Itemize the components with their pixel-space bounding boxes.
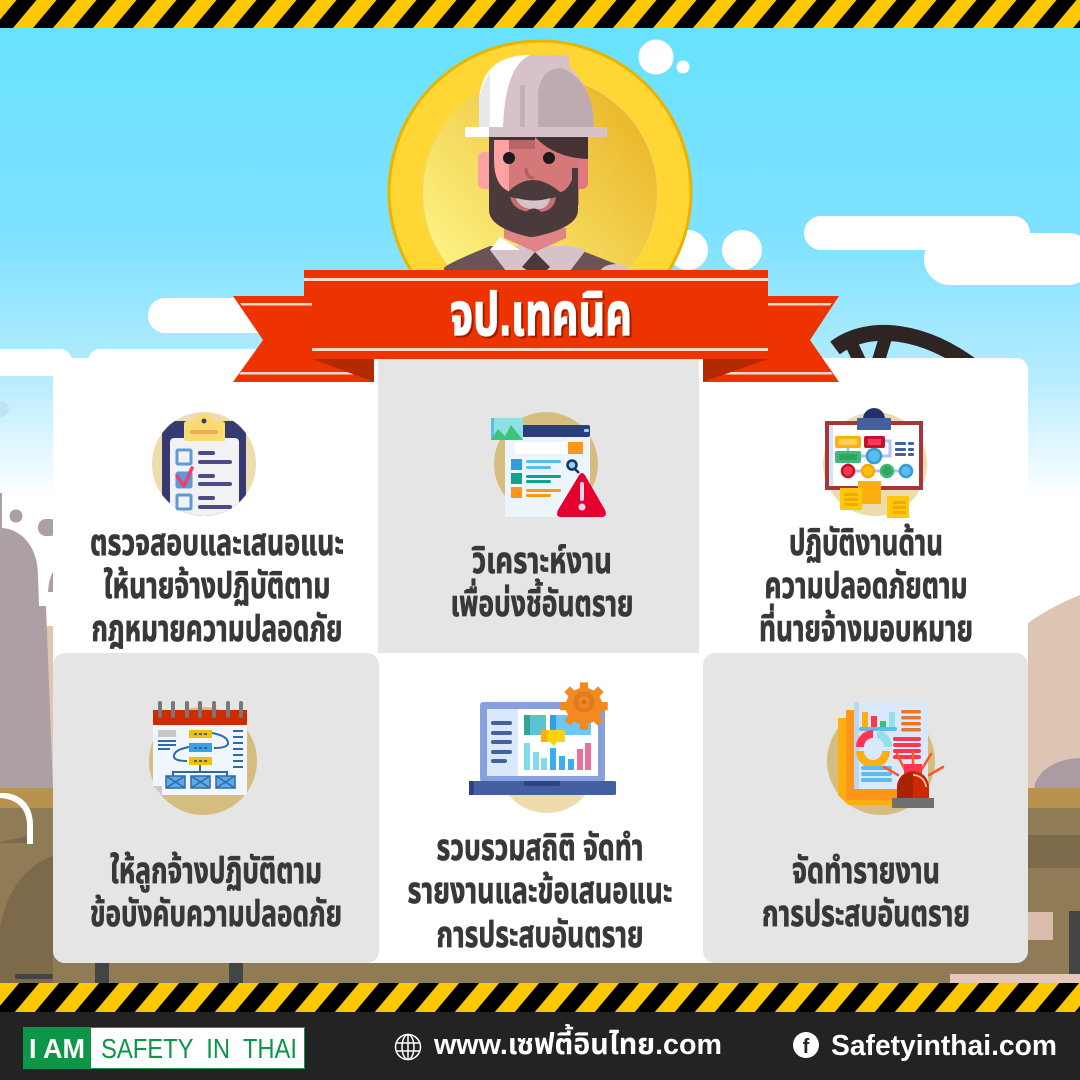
right tail xyxy=(703,296,839,382)
nose xyxy=(526,168,534,178)
text: collect statistics: การประสบอันตราย xyxy=(436,914,644,955)
title ribbon xyxy=(233,270,839,382)
icon: laptop statistics xyxy=(469,682,616,813)
logo: I AM xyxy=(29,1033,85,1064)
right hill silhouette xyxy=(1028,595,1080,790)
eyes xyxy=(503,152,515,164)
logo xyxy=(23,1027,304,1069)
left factory silhouette xyxy=(0,493,58,790)
text: accident report: จัดทำรายงาน xyxy=(792,850,940,891)
left tail xyxy=(233,296,374,382)
hazard stripe: bottom xyxy=(0,983,1080,1012)
text: inspect and advise: กฎหมายความปลอดภัย xyxy=(92,608,342,649)
character: engineer xyxy=(444,55,632,271)
facebook page text: Safetyinthai.com xyxy=(831,1030,1057,1062)
title xyxy=(450,281,634,350)
suit xyxy=(444,246,632,271)
card background: bottom right xyxy=(703,653,1028,963)
clouds xyxy=(0,40,1080,417)
icon: calendar flowchart xyxy=(149,703,257,815)
icon: globe xyxy=(396,1034,420,1060)
text: analyse work: เพื่อบ่งชี้อันตราย xyxy=(450,578,634,624)
footer bar xyxy=(0,1012,1080,1080)
text: employees comply: ข้อบังคับความปลอดภัย xyxy=(90,893,342,934)
text: safety duties: ปฏิบัติงานด้าน xyxy=(789,522,943,563)
text: safety duties: ที่นายจ้างมอบหมาย xyxy=(759,603,973,649)
text: employees comply: ให้ลูกจ้างปฏิบัติตาม xyxy=(110,850,322,892)
ears xyxy=(478,152,498,189)
text: collect statistics: รวบรวมสถิติ จัดทำ xyxy=(436,827,644,868)
ribbon main xyxy=(304,270,768,359)
card background: top middle xyxy=(378,359,699,653)
hazard stripe: top xyxy=(0,0,1080,28)
text: inspect and advise: ตรวจสอบและเสนอแนะ xyxy=(90,522,344,563)
text: safety duties xyxy=(759,522,973,649)
gear xyxy=(560,682,608,730)
hair xyxy=(535,137,588,159)
card background: bottom left xyxy=(53,653,379,963)
text: inspect and advise xyxy=(90,522,344,649)
logo: SAFETY IN THAI xyxy=(101,1033,297,1064)
wheel silhouette xyxy=(835,333,975,368)
icon: clipboard checklist xyxy=(152,412,256,516)
mouth xyxy=(510,197,556,212)
text: collect statistics: รายงานและข้อเสนอแนะ xyxy=(408,870,672,911)
beard xyxy=(489,137,578,237)
text: safety duties: ความปลอดภัยตาม xyxy=(764,565,968,606)
cards panel xyxy=(53,358,1028,963)
icon: facebook xyxy=(793,1032,819,1058)
sky background xyxy=(0,28,1080,498)
text: analyse work: วิเคราะห์งาน xyxy=(471,540,612,581)
icon: report and siren xyxy=(827,702,943,815)
website text: www.เซฟตี้อินไทย.com xyxy=(433,1023,722,1061)
face xyxy=(489,135,579,205)
ribbon fold shadows xyxy=(312,359,374,382)
ground xyxy=(0,788,1080,983)
medal xyxy=(388,40,692,270)
text: employees comply xyxy=(90,850,342,934)
title: จป.เทคนิค xyxy=(450,281,632,348)
text: analyse work xyxy=(450,540,634,624)
title: จป.เทคนิค xyxy=(452,283,634,350)
icon: process board xyxy=(823,408,927,518)
icon: analysis window with warning xyxy=(491,412,606,517)
text: inspect and advise: ให้นายจ้างปฏิบัติตาม xyxy=(104,565,330,606)
helmet xyxy=(465,55,607,137)
text: accident report xyxy=(762,850,970,934)
text: collect statistics xyxy=(408,827,672,955)
lower background xyxy=(0,498,1080,788)
neck xyxy=(504,228,566,252)
icon: facebook: f xyxy=(803,1036,810,1058)
text: accident report: การประสบอันตราย xyxy=(762,893,970,934)
